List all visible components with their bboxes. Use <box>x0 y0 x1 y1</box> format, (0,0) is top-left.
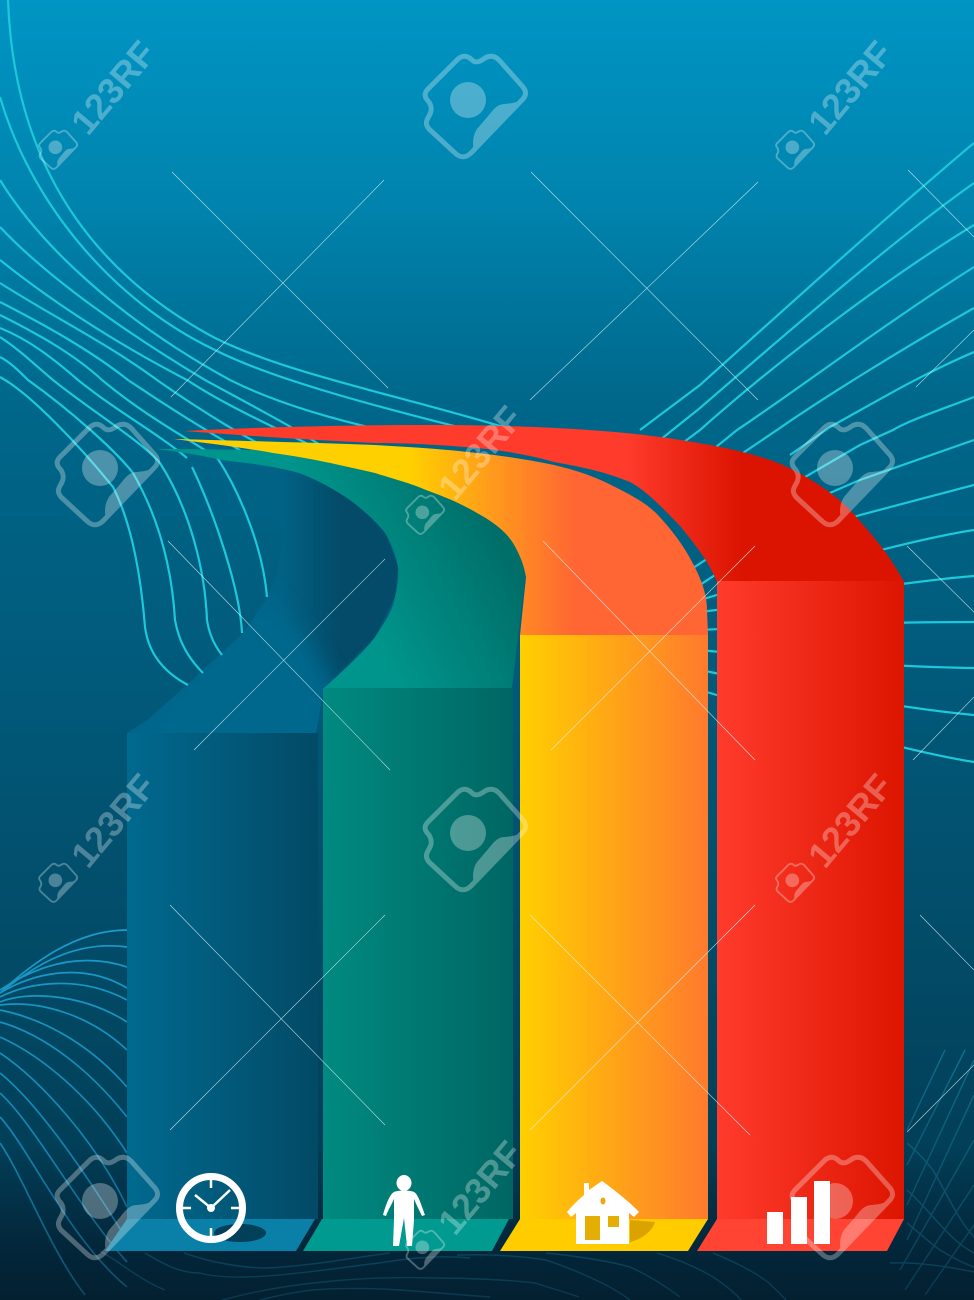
thin white cross lines <box>168 170 974 1135</box>
dim wave lines, lower left swirl <box>0 930 127 1295</box>
panel: yellow column <box>174 439 708 1251</box>
watermark logos and 123RF text: 123RF <box>800 33 901 142</box>
watermark logos and 123RF text: 123RF <box>430 1133 531 1242</box>
red ribbon top <box>184 425 904 582</box>
icon: clock <box>180 1176 266 1242</box>
teal floor step <box>303 1219 509 1251</box>
panel: blue column <box>105 450 410 1251</box>
watermark logos and 123RF text: 123RF <box>63 33 164 142</box>
background wave lines, right <box>640 143 974 762</box>
blue floor step <box>105 1219 315 1251</box>
icon: bar chart <box>767 1181 830 1244</box>
panel: teal column <box>156 449 526 1251</box>
blue column face <box>127 733 318 1219</box>
background wave lines, upper left <box>0 0 520 685</box>
watermark logos and 123RF text: 123RF <box>800 766 901 875</box>
blue ribbon top <box>128 473 398 733</box>
watermark logos and 123RF text: 123RF <box>430 398 531 507</box>
icon: person <box>383 1175 425 1246</box>
icon: house <box>567 1181 655 1244</box>
dim wave lines, bottom band and lower right grid <box>100 1050 974 1300</box>
yellow floor step <box>500 1219 708 1251</box>
panel: red column <box>184 425 904 1251</box>
teal ribbon top <box>156 449 526 688</box>
yellow column face <box>520 635 708 1219</box>
teal column face <box>323 688 513 1219</box>
red column face <box>717 581 904 1219</box>
watermark logos and 123RF text: 123RF <box>63 766 164 875</box>
yellow ribbon top <box>174 439 708 635</box>
red floor step <box>697 1219 904 1251</box>
